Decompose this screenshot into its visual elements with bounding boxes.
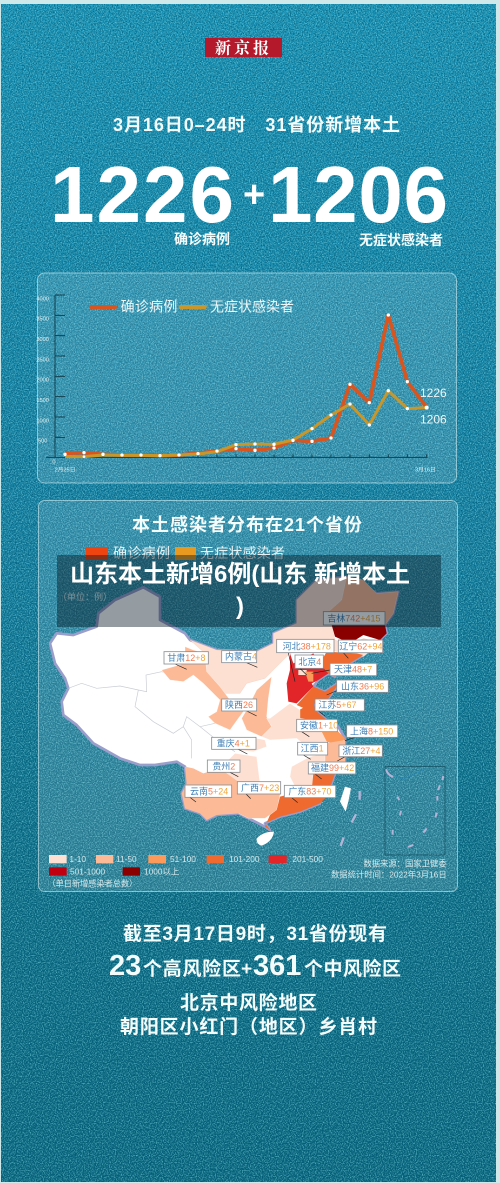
label: 广西: 广西7+23 bbox=[241, 782, 279, 793]
region: Heilongjiang bbox=[327, 577, 398, 625]
internal borders bbox=[68, 672, 235, 758]
end value labels bbox=[420, 386, 447, 426]
line chart: 500 bbox=[38, 439, 47, 445]
overlay banner title: ) bbox=[236, 593, 244, 620]
island dashes bbox=[341, 791, 360, 846]
region: Jilin bbox=[332, 625, 387, 643]
colour legend: 501-1000 bbox=[70, 867, 106, 877]
label: 陕西 bbox=[222, 699, 257, 716]
line chart: 2000 bbox=[36, 378, 49, 384]
chart legend bbox=[91, 298, 294, 314]
label: 江苏: 江苏5+67 bbox=[318, 699, 357, 710]
region: Tianjin bbox=[305, 672, 313, 682]
colour legend: 1000以上 bbox=[144, 867, 179, 877]
line chart: 1500 bbox=[36, 398, 49, 404]
panel: distribution map bbox=[38, 500, 458, 892]
inset: South China Sea bbox=[385, 767, 445, 855]
headline numbers: 1226 bbox=[50, 150, 234, 239]
line chart: 3500 bbox=[36, 317, 49, 323]
label: 北京 bbox=[295, 655, 323, 675]
label: 云南 bbox=[185, 785, 232, 802]
headline numbers: 1206 bbox=[268, 150, 448, 239]
heading: date and scope: 3月16日0–24时 31省份新增本土 bbox=[113, 114, 400, 135]
label: 江苏 bbox=[315, 699, 364, 716]
label: 上海: 上海8+150 bbox=[350, 725, 393, 736]
overlay banner title bbox=[57, 555, 441, 627]
line chart: 3月16日 bbox=[415, 466, 436, 473]
label: 重庆 bbox=[212, 737, 256, 754]
region: Guangxi bbox=[237, 782, 280, 818]
label: 吉林: 吉林742+415 bbox=[327, 613, 381, 624]
label: 北京: 北京4 bbox=[298, 656, 321, 667]
colour legend: 1-10 bbox=[69, 854, 86, 864]
region: Shaanxi bbox=[242, 677, 272, 737]
colour legend: 201-500 bbox=[292, 854, 323, 864]
end value labels: 1226 bbox=[420, 386, 447, 400]
region: Hainan bbox=[257, 832, 274, 846]
line chart: 1000 bbox=[36, 418, 49, 424]
map legend top: 确诊病例 bbox=[113, 545, 170, 561]
colour legend: 11-50 bbox=[116, 854, 137, 864]
china map bbox=[47, 577, 447, 889]
label: 江西: 江西1 bbox=[301, 744, 324, 754]
label: 甘肃: 甘肃12+8 bbox=[167, 652, 206, 663]
chart legend: 无症状感染者 bbox=[210, 298, 294, 314]
line chart: 3000 bbox=[36, 337, 49, 343]
summary text: 361 bbox=[253, 950, 301, 982]
label: 天津: 天津48+7 bbox=[334, 665, 372, 675]
label: 贵州: 贵州2 bbox=[212, 760, 235, 771]
label: 福建: 福建99+42 bbox=[311, 762, 354, 773]
label: 陕西: 陕西26 bbox=[225, 699, 253, 710]
map heading: 本土感染者分布在21个省份 bbox=[132, 515, 362, 535]
data source note bbox=[331, 858, 447, 879]
colour legend: （单日新增感染者总数） bbox=[47, 879, 137, 889]
region: Henan and Anhui bbox=[262, 703, 327, 747]
label: 安徽 bbox=[297, 719, 338, 737]
headline numbers: 无症状感染者 bbox=[359, 232, 443, 248]
region: Inner Mongolia bbox=[190, 577, 380, 693]
summary text: 个中风险区 bbox=[304, 957, 401, 980]
label: 吉林 bbox=[323, 612, 385, 630]
label: 辽宁: 辽宁62+94 bbox=[339, 641, 383, 652]
summary text: + bbox=[241, 959, 252, 980]
region: Hebei bbox=[287, 653, 328, 703]
label: 浙江: 浙江27+4 bbox=[342, 745, 381, 756]
province labels bbox=[164, 612, 398, 803]
label: 甘肃 bbox=[164, 652, 208, 669]
summary text bbox=[109, 923, 401, 1038]
label: 浙江 bbox=[337, 745, 382, 761]
label: 云南: 云南5+24 bbox=[190, 785, 228, 796]
label: 广西 bbox=[237, 782, 281, 799]
label: 广东 bbox=[284, 785, 336, 803]
line chart: 2500 bbox=[36, 357, 49, 363]
region: Jiangxi bbox=[290, 753, 325, 788]
summary text: 朝阳区小红门（地区）乡肖村 bbox=[120, 1015, 377, 1038]
label: 广东: 广东83+70 bbox=[288, 786, 332, 797]
data source note: 数据来源：国家卫健委 bbox=[363, 858, 447, 868]
region: Liaoning bbox=[320, 652, 363, 677]
label: 贵州 bbox=[207, 760, 240, 777]
label: 内蒙古: 内蒙古4 bbox=[225, 651, 257, 662]
mainland silhouette bbox=[50, 577, 398, 830]
headline numbers: + bbox=[243, 174, 265, 216]
line chart: 4000 bbox=[36, 296, 49, 302]
region: Guangdong bbox=[265, 790, 333, 830]
label: 安徽: 安徽1+10 bbox=[300, 719, 338, 730]
region: Shanghai area bbox=[322, 730, 345, 745]
headline numbers bbox=[50, 150, 448, 248]
label: 河北 bbox=[277, 639, 334, 682]
colour legend: 51-100 bbox=[170, 854, 196, 864]
summary text: 截至3月17日9时，31省份现有 bbox=[123, 923, 387, 945]
map legend top: 无症状感染者 bbox=[200, 545, 285, 561]
colour legend bbox=[47, 854, 323, 889]
overlay banner title: 山东本土新增6例(山东 新增本土 bbox=[70, 561, 410, 588]
panel: trend line chart bbox=[36, 273, 457, 483]
chart legend: 确诊病例 bbox=[121, 298, 177, 314]
region: Taiwan bbox=[340, 787, 351, 812]
region: Gansu bbox=[162, 647, 243, 730]
label: 上海 bbox=[345, 725, 398, 741]
label: 山东 bbox=[327, 680, 388, 695]
region: Chongqing bbox=[237, 738, 267, 752]
region: Beijing bbox=[298, 670, 307, 675]
region: Guizhou bbox=[220, 753, 260, 783]
label: 江西 bbox=[298, 742, 328, 759]
label: 辽宁 bbox=[338, 640, 383, 658]
colour legend: 101-200 bbox=[229, 854, 260, 864]
label: 河北: 河北38+178 bbox=[283, 640, 331, 651]
region: Yunnan bbox=[182, 767, 240, 820]
summary text: 北京中风险地区 bbox=[180, 991, 317, 1014]
end value labels: 1206 bbox=[420, 412, 447, 426]
label: 天津 bbox=[312, 663, 377, 676]
line chart bbox=[36, 295, 447, 473]
data source note: 数据统计时间：2022年3月16日 bbox=[331, 869, 447, 879]
region: Jiangsu bbox=[297, 702, 338, 727]
region: Shandong bbox=[297, 682, 340, 712]
label: 山东: 山东36+96 bbox=[341, 680, 384, 691]
summary text: 23 bbox=[109, 950, 141, 982]
map legend top bbox=[86, 545, 285, 561]
region: Fujian bbox=[312, 773, 335, 803]
region: Zhejiang bbox=[325, 740, 345, 773]
line chart: 2月25日 bbox=[55, 466, 75, 473]
line chart: 0 bbox=[52, 460, 56, 466]
logo: 新京报: 新京报 bbox=[215, 36, 272, 58]
label: 重庆: 重庆4+1 bbox=[217, 737, 250, 748]
label: 内蒙古 bbox=[222, 651, 257, 667]
summary text: 个高风险区 bbox=[143, 957, 241, 980]
label: 福建 bbox=[308, 762, 356, 779]
headline numbers: 确诊病例 bbox=[174, 231, 230, 247]
unit note: （单位：例） bbox=[58, 591, 112, 602]
